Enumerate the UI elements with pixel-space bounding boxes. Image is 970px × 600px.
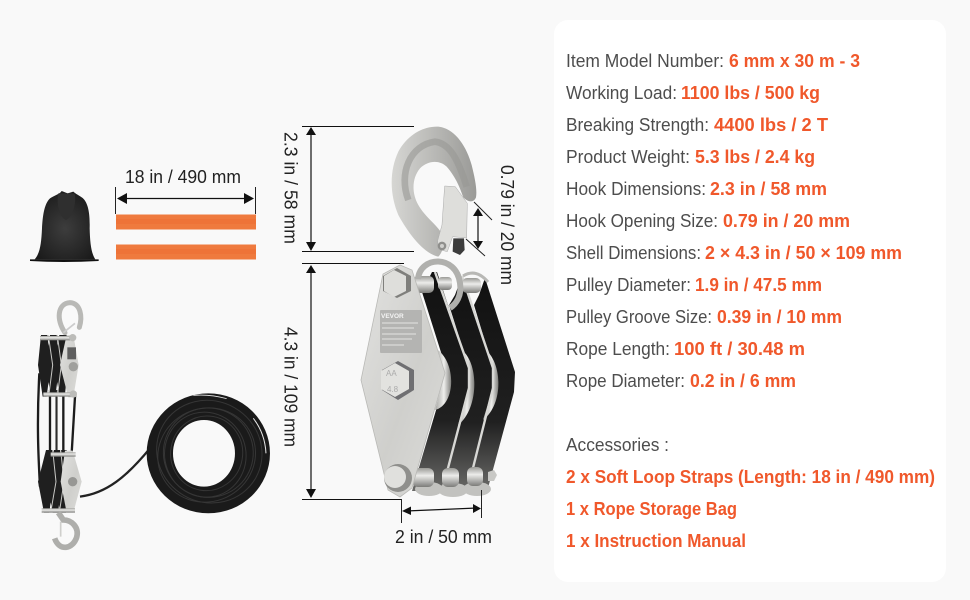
accessories heading: Accessories : <box>566 435 669 455</box>
bottom spacer bars <box>412 467 483 487</box>
small pulley set <box>38 303 82 547</box>
panel: specifications <box>554 20 946 582</box>
spec: working load: Working Load: <box>566 83 677 103</box>
top bolt <box>383 268 411 298</box>
spec: item model number: Item Model Number: <box>566 51 724 71</box>
shell width arrow <box>402 504 481 515</box>
spec: product weight: Product Weight: <box>566 147 690 167</box>
icon: rope storage bag <box>30 191 99 262</box>
spec: pulley diameter <box>566 275 822 295</box>
spec: product weight: 5.3 lbs / 2.4 kg <box>695 147 815 167</box>
spec: shell dimensions: Shell Dimensions: <box>566 243 701 263</box>
hook height arrow <box>306 127 316 251</box>
accessory: straps: 2 x Soft Loop Straps (Length: 18 in / 490 mm) <box>566 467 935 487</box>
panel background <box>554 20 946 582</box>
accessory: bag: 1 x Rope Storage Bag <box>566 499 737 519</box>
sheave wheels <box>435 350 498 425</box>
spec: working load <box>566 83 820 103</box>
dimension: strap length <box>116 167 256 214</box>
spec: rope length: 100 ft / 30.48 m <box>674 339 805 359</box>
centre bolt: 4.8 <box>387 385 399 394</box>
spec: hook opening size: Hook Opening Size: <box>566 211 718 231</box>
accessory: manual: 1 x Instruction Manual <box>566 531 746 551</box>
rear plate top lobe <box>463 273 488 282</box>
spec: pulley groove size <box>566 307 842 327</box>
top spacer bars <box>413 276 481 293</box>
front plate <box>361 265 445 497</box>
hook opening arrow <box>473 208 483 249</box>
shell width label: 2 in / 50 mm <box>395 527 492 547</box>
spec: shell dimensions <box>566 243 902 263</box>
spec: pulley diameter: Pulley Diameter: <box>566 275 691 295</box>
spec: item model number: 6 mm x 30 m - 3 <box>729 51 860 71</box>
strap length label: 18 in / 490 mm <box>125 167 241 187</box>
spec: working load: 1100 lbs / 500 kg <box>681 83 820 103</box>
dimension: shell height <box>280 264 404 500</box>
spec: pulley groove size: Pulley Groove Size: <box>566 307 712 327</box>
bottom bolt <box>384 464 412 492</box>
spec: hook opening size <box>566 211 850 231</box>
specification tag <box>380 310 422 353</box>
spec: rope diameter <box>566 371 796 391</box>
shell height label: 4.3 in / 109 mm <box>280 327 300 447</box>
rear sheave band <box>466 278 515 490</box>
dimension: hook height <box>280 126 414 252</box>
spec: hook opening size: 0.79 in / 20 mm <box>723 211 850 231</box>
hook body <box>392 127 476 257</box>
latch pivot <box>438 238 465 255</box>
spec: breaking strength: Breaking Strength: <box>566 115 709 135</box>
front sheave band <box>412 272 469 491</box>
dimension: hook opening <box>466 165 517 285</box>
specification tag: VEVOR <box>381 313 404 320</box>
assembled pulley set with coiled rope <box>38 303 281 547</box>
swivel eye <box>418 261 460 308</box>
spec: breaking strength: 4400 lbs / 2 T <box>714 115 828 135</box>
spec: rope length: Rope Length: <box>566 339 670 359</box>
spec: rope diameter: 0.2 in / 6 mm <box>690 371 796 391</box>
spec: pulley groove size: 0.39 in / 10 mm <box>717 307 842 327</box>
bottom lobes <box>415 482 491 497</box>
triple-sheave pulley block <box>361 261 515 497</box>
spec: breaking strength <box>566 115 828 135</box>
spec: hook dimensions: Hook Dimensions: <box>566 179 706 199</box>
spec: pulley diameter: 1.9 in / 47.5 mm <box>695 275 822 295</box>
hook shading <box>405 142 467 200</box>
hook height label: 2.3 in / 58 mm <box>280 132 300 244</box>
spec: hook dimensions: 2.3 in / 58 mm <box>710 179 827 199</box>
rope coil <box>80 381 281 522</box>
safety latch <box>438 186 467 252</box>
soft loop strap 1 <box>116 214 256 230</box>
hook opening label: 0.79 in / 20 mm <box>497 165 517 285</box>
dimension: shell width <box>395 490 492 547</box>
spec: product weight <box>566 147 815 167</box>
spec: shell dimensions: 2 × 4.3 in / 50 × 109 mm <box>705 243 902 263</box>
bolt tip <box>488 470 497 481</box>
shell height arrow <box>306 265 316 498</box>
spec: rope length <box>566 339 805 359</box>
spec: hook dimensions <box>566 179 827 199</box>
soft loop strap 2 <box>116 244 256 260</box>
spec: item model number <box>566 51 860 71</box>
hook with safety latch <box>392 127 476 257</box>
middle sheave band <box>441 276 493 492</box>
centre bolt: AA <box>386 369 397 378</box>
silver cheek plate edges <box>435 272 493 492</box>
spec: rope diameter: Rope Diameter: <box>566 371 685 391</box>
centre bolt <box>381 361 414 400</box>
strap length arrow <box>116 187 256 214</box>
